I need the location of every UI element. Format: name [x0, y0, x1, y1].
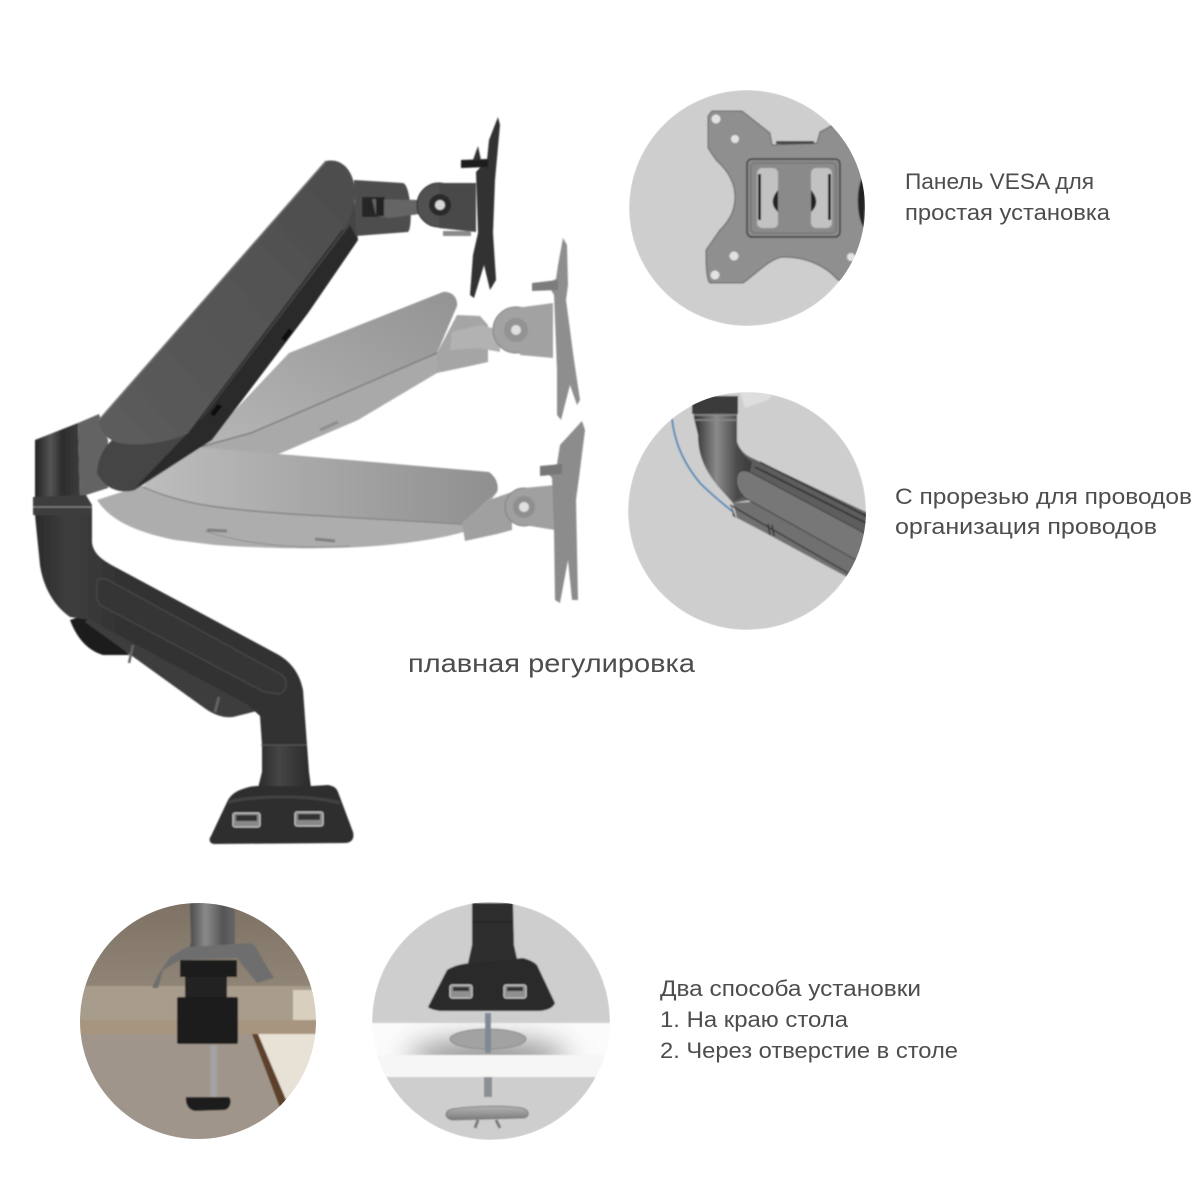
- stand and base: [468, 903, 518, 963]
- bolt: [485, 1013, 491, 1053]
- text: mounting methods: [660, 976, 958, 1063]
- text: cable management: организация проводов: [895, 514, 1157, 539]
- text: mounting methods: Два способа установки: [660, 976, 921, 1001]
- panel: VESA plate circle: [629, 90, 870, 326]
- lower support arm: [35, 515, 307, 745]
- arm column and hinge: [33, 414, 108, 515]
- panel: edge clamp circle: [78, 900, 320, 1140]
- VESA plate: [706, 111, 870, 290]
- icon: USB port right: [295, 812, 323, 826]
- lowest ghost position of arm: [97, 421, 585, 603]
- panel: cable management circle: [628, 392, 870, 630]
- text: VESA panel: простая установка: [905, 200, 1111, 225]
- panel: through-desk mount circle: [370, 902, 615, 1140]
- icon: USB port left: [233, 813, 260, 827]
- caption: smooth adjustment: плавная регулировка: [408, 648, 696, 678]
- top VESA joint and plate: [354, 117, 500, 298]
- desk slab: [370, 1023, 615, 1056]
- support arm close-up: [732, 501, 856, 577]
- text: mounting methods: 1. На краю стола: [660, 1007, 849, 1032]
- text: VESA panel: Панель VESA для: [905, 169, 1094, 194]
- text: cable management: С прорезью для проводов: [895, 484, 1192, 509]
- text: mounting methods: 2. Через отверстие в столе: [660, 1038, 958, 1063]
- main illustration: monitor arm with three positions: [33, 117, 585, 844]
- text: VESA panel: [905, 169, 1111, 225]
- desk base with USB ports: [210, 745, 353, 844]
- text: cable management: [895, 484, 1192, 539]
- mounting plate: [446, 1106, 528, 1120]
- top arm position in full colour: [97, 161, 358, 491]
- middle ghost position of arm: [143, 238, 580, 490]
- clamp stand: [190, 903, 236, 948]
- cable line: [672, 419, 732, 511]
